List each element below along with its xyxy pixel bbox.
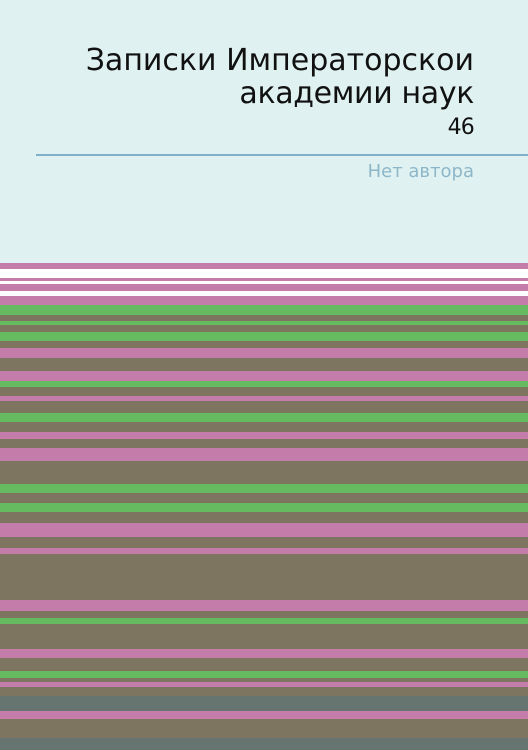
author: Нет автора	[368, 161, 474, 182]
divider line	[36, 154, 528, 156]
volume number: 46	[448, 115, 474, 140]
title: Записки Императорскои	[86, 43, 474, 78]
title	[86, 43, 474, 111]
title: академии наук	[239, 76, 474, 111]
striped band	[0, 263, 528, 750]
